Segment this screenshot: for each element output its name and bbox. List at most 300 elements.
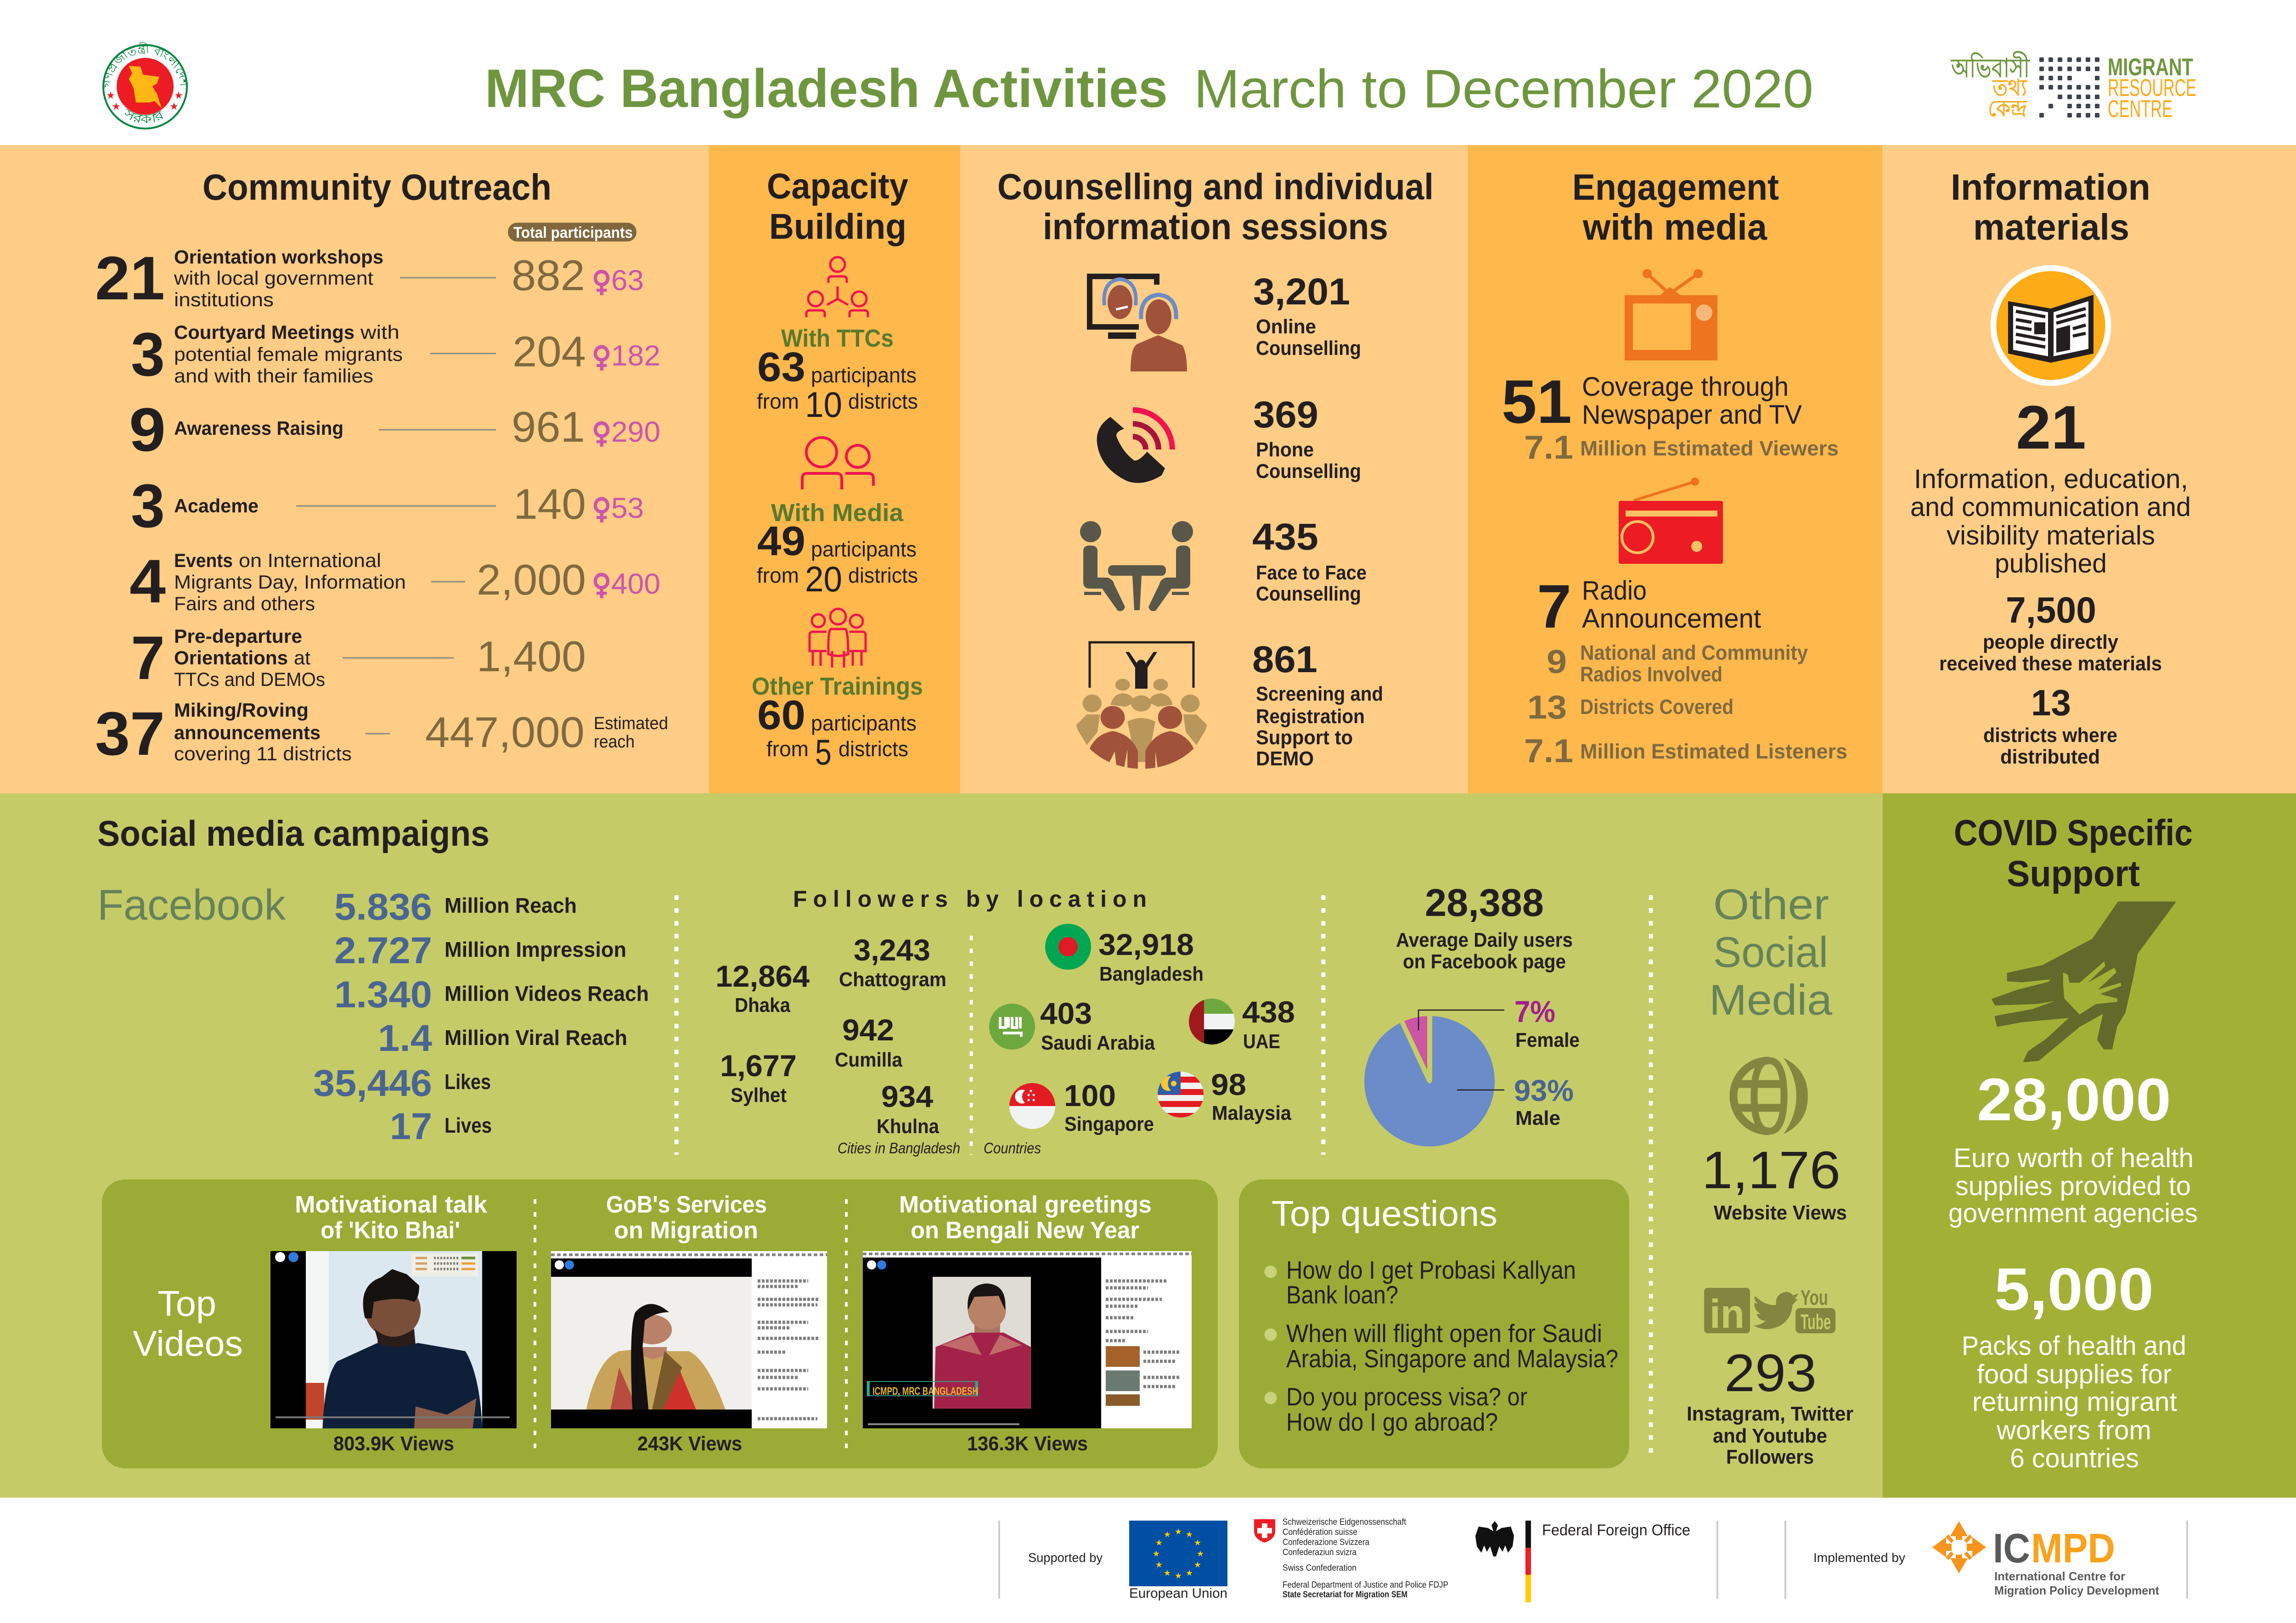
heading: capacity building: Building xyxy=(769,206,906,247)
icon: online counselling xyxy=(1090,276,1187,371)
icon: flag of UAE xyxy=(1189,999,1235,1045)
row: events: Migrants Day, Information xyxy=(174,571,406,593)
stat: 28000 euro: supplies provided to xyxy=(1955,1171,2191,1201)
stat: 28000 euro xyxy=(1948,1066,2198,1228)
stat: 5000 packs: 6 countries xyxy=(2010,1443,2139,1473)
icon: youtube: You xyxy=(1801,1286,1828,1309)
row: miking and roving xyxy=(95,699,668,768)
stat: with media: With Media xyxy=(771,499,904,527)
row: courtyard meetings: potential female migrants xyxy=(174,343,403,365)
stat: 21 materials published xyxy=(1910,393,2191,578)
stat: with TTCs: from xyxy=(757,389,799,413)
block: facebook stats: Likes xyxy=(445,1070,491,1094)
title: MRC Bangladesh Activities xyxy=(485,58,1168,119)
question 2: Arabia, Singapore and Malaysia? xyxy=(1286,1344,1618,1373)
label: top videos: Videos xyxy=(133,1323,243,1364)
logo: ICMPD xyxy=(1932,1521,2159,1597)
row: awareness raising: 961 xyxy=(512,403,585,451)
stat: with TTCs: 63 xyxy=(757,344,805,390)
pie chart: gender split: 93% xyxy=(1514,1073,1574,1107)
stat: face to face: Counselling xyxy=(1256,583,1361,605)
icon: youtube: Tube xyxy=(1801,1310,1831,1334)
block: cities in Bangladesh xyxy=(715,933,960,1157)
block: other social media: Website Views xyxy=(1714,1202,1847,1224)
video 3: Bengali New Year: 136.3K Views xyxy=(967,1432,1088,1455)
logo: german federal foreign office: Federal Foreign Office xyxy=(1542,1522,1690,1539)
logo: swiss confederation: Swiss Confederation xyxy=(1283,1563,1356,1573)
stat: phone counselling: Phone xyxy=(1256,438,1314,461)
block: countries: UAE xyxy=(1243,1030,1280,1053)
row: awareness raising xyxy=(129,396,660,464)
pie chart: gender split: Male xyxy=(1515,1107,1560,1129)
row: events: Fairs and others xyxy=(174,593,315,614)
stat: with TTCs: participants xyxy=(811,363,917,387)
row: events: 4 xyxy=(129,547,166,616)
row: orientation workshops: 882 xyxy=(512,251,585,299)
row: orientation workshops: Orientation workshops xyxy=(174,246,383,268)
panel: community outreach xyxy=(0,145,709,793)
block: countries: 32,918 xyxy=(1098,927,1194,961)
row: awareness raising: Awareness Raising xyxy=(174,417,343,439)
stat: other trainings: from xyxy=(766,737,809,761)
title xyxy=(485,58,1813,119)
heading: community outreach: Community Outreach xyxy=(203,167,551,208)
still: woman talking xyxy=(551,1251,827,1428)
question 3: How do I go abroad? xyxy=(1286,1408,1498,1436)
row: events: 400 xyxy=(611,568,660,600)
stat: other trainings xyxy=(752,673,923,772)
block: countries xyxy=(984,924,1295,1157)
row: pre-departure orientations: at xyxy=(294,647,310,668)
stat: phone counselling xyxy=(1253,394,1361,483)
block: facebook stats: 1.4 xyxy=(378,1017,432,1059)
row: courtyard meetings: with xyxy=(360,321,400,343)
icon: flag of Malaysia xyxy=(1158,1072,1204,1119)
stat: screening and registration: DEMO xyxy=(1256,747,1314,770)
row: miking and roving: covering 11 districts xyxy=(174,743,352,764)
stat: 13 districts: districts where xyxy=(1983,724,2117,747)
panel: counselling and individual information sessions xyxy=(960,145,1468,793)
block: countries: 98 xyxy=(1211,1067,1246,1101)
row: courtyard meetings: 3 xyxy=(131,320,165,389)
video 3: Bengali New Year: Motivational greetings xyxy=(899,1191,1152,1218)
block: facebook stats: Million Reach xyxy=(445,893,577,917)
row: courtyard meetings: and with their families xyxy=(174,365,373,387)
stat: 5000 packs: returning migrant xyxy=(1972,1387,2177,1417)
icon: phone with signal xyxy=(1097,410,1172,483)
header band xyxy=(0,0,2296,145)
heading: engagement with media xyxy=(1572,167,1779,247)
stat: 7500 people: people directly xyxy=(1983,631,2118,653)
stat: with TTCs: 10 xyxy=(805,384,842,425)
stat: radio announcement: 7 xyxy=(1537,573,1571,641)
stat: with media: 20 xyxy=(805,559,842,599)
heading: information materials: materials xyxy=(1973,207,2129,247)
logo: migrant resource centre xyxy=(1951,51,2196,123)
block: cities in Bangladesh: 3,243 xyxy=(854,933,930,967)
stat: with TTCs: districts xyxy=(848,389,918,413)
row: miking and roving: 447,000 xyxy=(425,708,585,756)
block: countries: 403 xyxy=(1040,996,1092,1030)
text: supported by: Supported by xyxy=(1028,1550,1103,1565)
heading: information materials xyxy=(1951,167,2150,247)
row: courtyard meetings xyxy=(131,320,660,389)
icon: twitter bird xyxy=(1754,1292,1799,1329)
block: countries: 438 xyxy=(1242,995,1295,1029)
block: cities in Bangladesh: 1,677 xyxy=(720,1049,797,1083)
row: pre-departure orientations: 7 xyxy=(131,624,165,692)
stat: radio announcement: Radios Involved xyxy=(1580,663,1722,686)
stat: newspaper and TV coverage: 51 xyxy=(1502,368,1572,436)
row: miking and roving: announcements xyxy=(174,722,321,743)
row: miking and roving: 37 xyxy=(95,700,165,768)
row: academe: ♀ xyxy=(592,492,611,525)
panel: covid specific support xyxy=(1883,793,2296,1498)
icon: group of three xyxy=(810,609,866,668)
stat: 28000 euro: government agencies xyxy=(1948,1198,2198,1228)
stat: face to face xyxy=(1252,516,1367,605)
icon: three people network xyxy=(806,257,868,317)
row: events xyxy=(129,547,660,616)
icon: flag of Singapore xyxy=(1009,1083,1055,1129)
block: facebook stats: 2.727 xyxy=(334,930,432,972)
pie chart: gender split xyxy=(1364,994,1580,1146)
question 3 xyxy=(1265,1382,1527,1436)
stat: screening and registration: Support to xyxy=(1256,726,1353,749)
logo: migrant resource centre: কেন্দ্র xyxy=(1988,95,2027,121)
row: academe: 140 xyxy=(513,480,586,528)
stat: newspaper and TV coverage: Coverage through xyxy=(1582,372,1789,402)
stat: phone counselling: Counselling xyxy=(1256,460,1361,483)
logo: ICMPD: MPD xyxy=(2031,1526,2115,1572)
logo: migrant resource centre: MIGRANT xyxy=(2108,54,2193,81)
block: other social media: Instagram, Twitter xyxy=(1687,1403,1853,1425)
block: countries: 100 xyxy=(1064,1078,1116,1112)
logo: migrant resource centre: তথ্য xyxy=(1992,75,2027,101)
government emblem: গণপ্রজাতন্ত্রী বাংলাদেশ xyxy=(100,42,190,89)
stat: screening and registration xyxy=(1252,639,1383,770)
pill: total participants: Total participants xyxy=(513,224,633,241)
logo: swiss confederation: Confederaziun svizra xyxy=(1283,1548,1356,1557)
stat: other trainings: Other Trainings xyxy=(752,673,923,700)
stat: online counselling: Counselling xyxy=(1256,337,1361,359)
video 1: Kito Bhai: of 'Kito Bhai' xyxy=(321,1217,460,1244)
block: facebook stats: 1.340 xyxy=(334,974,432,1016)
stat: 7500 people xyxy=(1939,590,2162,675)
stat: screening and registration: Screening and xyxy=(1256,683,1383,705)
row: pre-departure orientations: 1,400 xyxy=(477,632,586,680)
heading: engagement with media: Engagement xyxy=(1572,167,1779,208)
heading: counselling xyxy=(997,166,1434,247)
icon: face to face table xyxy=(1080,521,1193,611)
stat: face to face: 435 xyxy=(1252,516,1318,558)
block: facebook stats: Million Videos Reach xyxy=(445,982,649,1005)
heading: social media campaigns: Social media campaigns xyxy=(97,813,490,854)
row: awareness raising: ♀ xyxy=(592,416,611,449)
logo: swiss confederation: Confederazione Svizzera xyxy=(1283,1538,1369,1547)
block: cities in Bangladesh: Cumilla xyxy=(835,1049,902,1071)
stat: with TTCs: With TTCs xyxy=(781,325,894,352)
row: miking and roving: Miking/Roving xyxy=(174,699,309,721)
row: events: 2,000 xyxy=(477,556,586,604)
stat: radio announcement: 7.1 xyxy=(1524,733,1573,769)
heading: covid specific support: COVID Specific xyxy=(1954,812,2193,853)
logo: german federal foreign office xyxy=(1475,1521,1690,1602)
block: other social media: Social xyxy=(1713,928,1828,976)
heading: capacity building xyxy=(767,166,908,247)
government emblem: ★★★★ xyxy=(106,90,183,112)
logo: swiss confederation: Confédération suisse xyxy=(1283,1528,1357,1537)
block: facebook stats: Facebook xyxy=(97,881,286,929)
block: cities in Bangladesh: Sylhet xyxy=(731,1084,787,1106)
row: orientation workshops: 21 xyxy=(95,244,165,313)
logo: swiss confederation: Schweizerische Eidgenossenschaft xyxy=(1283,1517,1407,1527)
stat: 28000 euro: 28,000 xyxy=(1977,1066,2171,1133)
heading: counselling: Counselling and individual xyxy=(997,166,1434,207)
stat: with media: participants xyxy=(811,537,917,561)
icon: youtube xyxy=(1795,1286,1835,1334)
footer xyxy=(0,1498,2296,1623)
row: courtyard meetings: ♀ xyxy=(592,340,611,373)
row: pre-departure orientations: TTCs and DEMOs xyxy=(174,668,325,690)
video 2: GoB services: 243K Views xyxy=(637,1432,742,1455)
block: cities in Bangladesh: Khulna xyxy=(877,1115,939,1138)
stat: 28000 euro: Euro worth of health xyxy=(1953,1143,2194,1173)
question 3: Do you process visa? or xyxy=(1286,1382,1527,1411)
stat: newspaper and TV coverage: Million Estimated Viewers xyxy=(1580,437,1839,460)
block: other social media xyxy=(1687,880,1853,1468)
row: courtyard meetings: 204 xyxy=(512,327,586,376)
still: man greeting xyxy=(863,1251,1192,1428)
icon: flag of Saudi Arabia xyxy=(989,1004,1035,1050)
icon: radio xyxy=(1619,477,1723,564)
stat: 5000 packs: food supplies for xyxy=(1977,1359,2172,1389)
question 2 xyxy=(1265,1319,1618,1373)
block: facebook stats: 17 xyxy=(390,1106,432,1147)
heading: counselling: information sessions xyxy=(1043,206,1388,247)
row: academe: 3 xyxy=(131,472,165,540)
icon: flag of Bangladesh xyxy=(1045,924,1091,970)
row: miking and roving: Estimated xyxy=(594,714,668,733)
video 1: Kito Bhai xyxy=(270,1191,517,1455)
heading: top questions: Top questions xyxy=(1272,1193,1497,1234)
stat: newspaper and TV coverage xyxy=(1502,368,1839,466)
panel: engagement with media xyxy=(1468,145,1882,793)
video 1: Kito Bhai: 803.9K Views xyxy=(333,1432,454,1455)
stat: screening and registration: 861 xyxy=(1252,639,1317,680)
stat: 5000 packs: workers from xyxy=(1996,1415,2151,1445)
question 1: Bank loan? xyxy=(1286,1280,1398,1309)
stat: radio announcement: Districts Covered xyxy=(1580,695,1733,719)
stat: face to face: Face to Face xyxy=(1256,562,1367,584)
government emblem xyxy=(100,42,190,129)
icon: television xyxy=(1625,269,1717,360)
heading: covid specific support: Support xyxy=(2007,853,2140,894)
logo: swiss confederation: State Secretariat for Migration SEM xyxy=(1283,1590,1407,1600)
title: March to December 2020 xyxy=(1194,59,1813,119)
stat: 21 materials published: visibility materials xyxy=(1947,521,2155,550)
stat: radio announcement: 13 xyxy=(1527,689,1567,726)
icon: linkedin: in xyxy=(1710,1291,1745,1337)
stat: radio announcement: Million Estimated Listeners xyxy=(1580,740,1847,763)
stat: radio announcement: Radio xyxy=(1582,576,1647,606)
logo: migrant resource centre: RESOURCE xyxy=(2108,74,2196,101)
block: facebook stats: Million Viral Reach xyxy=(445,1026,627,1050)
block: facebook stats: Lives xyxy=(445,1113,492,1137)
block: countries: Countries xyxy=(984,1140,1041,1157)
logo: ICMPD: Migration Policy Development xyxy=(1994,1584,2159,1597)
block: cities in Bangladesh: Dhaka xyxy=(735,994,790,1016)
block: cities in Bangladesh: 942 xyxy=(842,1013,894,1047)
stat: screening and registration: Registration xyxy=(1256,705,1365,728)
block: daily users: Average Daily users xyxy=(1396,929,1573,951)
block: other social media: 1,176 xyxy=(1702,1141,1840,1200)
stat: 21 materials published: published xyxy=(1995,549,2107,578)
stat: radio announcement: National and Community xyxy=(1580,641,1808,664)
row: pre-departure orientations xyxy=(131,624,586,692)
logo: european union: ★★★★★★★★★★★★ xyxy=(1153,1527,1204,1581)
logo: migrant resource centre: CENTRE xyxy=(2108,95,2172,123)
row: academe: 53 xyxy=(611,492,644,524)
stat: 5000 packs: 5,000 xyxy=(1994,1255,2154,1323)
stat: 21 materials published: and communication and xyxy=(1910,492,2191,522)
stat: newspaper and TV coverage: 7.1 xyxy=(1524,429,1573,466)
panel: top questions xyxy=(1239,1179,1629,1468)
government emblem: সরকার xyxy=(121,106,167,126)
logo: european union: European Union xyxy=(1129,1586,1227,1601)
heading: followers by location: Followers by location xyxy=(793,886,1147,912)
row: miking and roving: reach xyxy=(594,732,635,752)
pie chart: gender split: Female xyxy=(1515,1029,1580,1051)
block: countries: Malaysia xyxy=(1212,1102,1291,1124)
row: pre-departure orientations: Orientations xyxy=(174,647,288,668)
logo: swiss confederation: Federal Department of Justice and Police FDJP xyxy=(1283,1580,1448,1590)
stat: other trainings: 60 xyxy=(757,692,805,738)
panel: capacity building xyxy=(709,145,960,793)
logo: ICMPD: International Centre for xyxy=(1994,1569,2125,1583)
stat: other trainings: participants xyxy=(811,711,917,735)
icon: crowd with presenter xyxy=(1075,642,1208,770)
block: cities in Bangladesh: Chattogram xyxy=(839,968,946,991)
row: orientation workshops: 63 xyxy=(611,264,644,297)
text: implemented by: Implemented by xyxy=(1813,1550,1905,1565)
heading: covid specific support xyxy=(1954,812,2193,894)
pie chart: gender split: 7% xyxy=(1514,994,1555,1028)
row: orientation workshops xyxy=(95,244,644,313)
stat: phone counselling: 369 xyxy=(1253,394,1318,436)
logo: ICMPD: IC xyxy=(1993,1526,2030,1572)
video 2: GoB services: on Migration xyxy=(614,1217,758,1244)
question 1: How do I get Probasi Kallyan xyxy=(1286,1256,1576,1284)
icon: two people xyxy=(802,438,873,489)
icon: helping hands xyxy=(1992,902,2175,1061)
row: orientation workshops: institutions xyxy=(174,289,274,310)
stat: 7500 people: received these materials xyxy=(1939,652,2162,675)
block: cities in Bangladesh: 934 xyxy=(881,1079,933,1113)
row: academe xyxy=(131,472,644,540)
row: events: ♀ xyxy=(592,567,611,601)
stat: radio announcement: Announcement xyxy=(1582,604,1761,634)
stat: with TTCs xyxy=(757,325,918,425)
block: daily users xyxy=(1396,881,1573,973)
row: events: Events xyxy=(174,550,233,571)
stat: 21 materials published: 21 xyxy=(2016,393,2086,462)
block: countries: Singapore xyxy=(1064,1113,1154,1135)
stat: 7500 people: 7,500 xyxy=(2006,590,2096,630)
video 3: Bengali New Year: on Bengali New Year xyxy=(911,1217,1139,1244)
stat: 5000 packs xyxy=(1962,1255,2186,1473)
row: events: on International xyxy=(239,550,381,571)
video 3: Bengali New Year xyxy=(863,1191,1192,1455)
stat: with media: from xyxy=(757,563,799,587)
stat: 13 districts: 13 xyxy=(2031,682,2071,723)
block: other social media: Other xyxy=(1713,880,1829,928)
block: daily users: 28,388 xyxy=(1425,881,1544,924)
still: man talking xyxy=(270,1251,517,1428)
stat: 13 districts: distributed xyxy=(2000,746,2100,768)
heading: engagement with media: with media xyxy=(1582,207,1767,247)
panel: social media campaigns xyxy=(0,793,1883,1498)
heading: information materials: Information xyxy=(1951,167,2150,208)
stat: radio announcement: 9 xyxy=(1547,644,1567,680)
stat: with media: districts xyxy=(848,563,918,587)
block: facebook stats xyxy=(97,881,649,1147)
block: facebook stats: 5.836 xyxy=(334,886,432,928)
block: cities in Bangladesh: Cities in Bangladesh xyxy=(838,1140,960,1157)
panel: information materials xyxy=(1882,145,2296,793)
logo: swiss confederation xyxy=(1254,1517,1448,1600)
row: pre-departure orientations: Pre-departure xyxy=(174,625,302,647)
stat: newspaper and TV coverage: Newspaper and TV xyxy=(1582,400,1802,430)
row: awareness raising: 9 xyxy=(129,396,166,464)
block: facebook stats: Million Impression xyxy=(445,938,626,961)
block: other social media: and Youtube xyxy=(1713,1425,1827,1447)
row: academe: Academe xyxy=(174,495,259,517)
panel: top videos xyxy=(102,1179,1218,1468)
stat: radio announcement xyxy=(1524,573,1847,769)
row: orientation workshops: with local government xyxy=(174,267,373,289)
question 2: When will flight open for Saudi xyxy=(1286,1319,1602,1348)
still: man greeting: ICMPD, MRC BANGLADESH xyxy=(872,1385,978,1398)
stat: online counselling: 3,201 xyxy=(1253,271,1350,313)
block: daily users: on Facebook page xyxy=(1403,950,1566,973)
video 2: GoB services xyxy=(551,1191,827,1455)
block: other social media: Media xyxy=(1709,976,1833,1024)
stat: 5000 packs: Packs of health and xyxy=(1962,1331,2186,1361)
block: countries: Bangladesh xyxy=(1099,963,1204,985)
video 1: Kito Bhai: Motivational talk xyxy=(295,1191,487,1218)
stat: other trainings: 5 xyxy=(815,732,832,772)
logo: european union xyxy=(1129,1521,1227,1601)
stat: 21 materials published: Information, education, xyxy=(1914,464,2188,494)
stat: other trainings: districts xyxy=(838,737,908,761)
block: other social media: Followers xyxy=(1726,1446,1814,1468)
stat: with media: 49 xyxy=(757,518,805,564)
stat: online counselling: Online xyxy=(1256,315,1316,338)
stat: 13 districts xyxy=(1983,682,2117,768)
row: courtyard meetings: Courtyard Meetings xyxy=(174,321,355,343)
label: top videos xyxy=(133,1283,243,1364)
block: cities in Bangladesh: 12,864 xyxy=(715,959,810,993)
block: countries: Saudi Arabia xyxy=(1041,1032,1155,1054)
logo: migrant resource centre: অভিবাসী xyxy=(1951,51,2030,83)
stat: online counselling xyxy=(1253,271,1361,359)
row: orientation workshops: ♀ xyxy=(592,264,611,298)
row: courtyard meetings: 182 xyxy=(611,340,660,372)
video 2: GoB services: GoB's Services xyxy=(606,1191,767,1218)
block: facebook stats: 35,446 xyxy=(313,1062,432,1104)
block: other social media: 293 xyxy=(1724,1344,1817,1403)
